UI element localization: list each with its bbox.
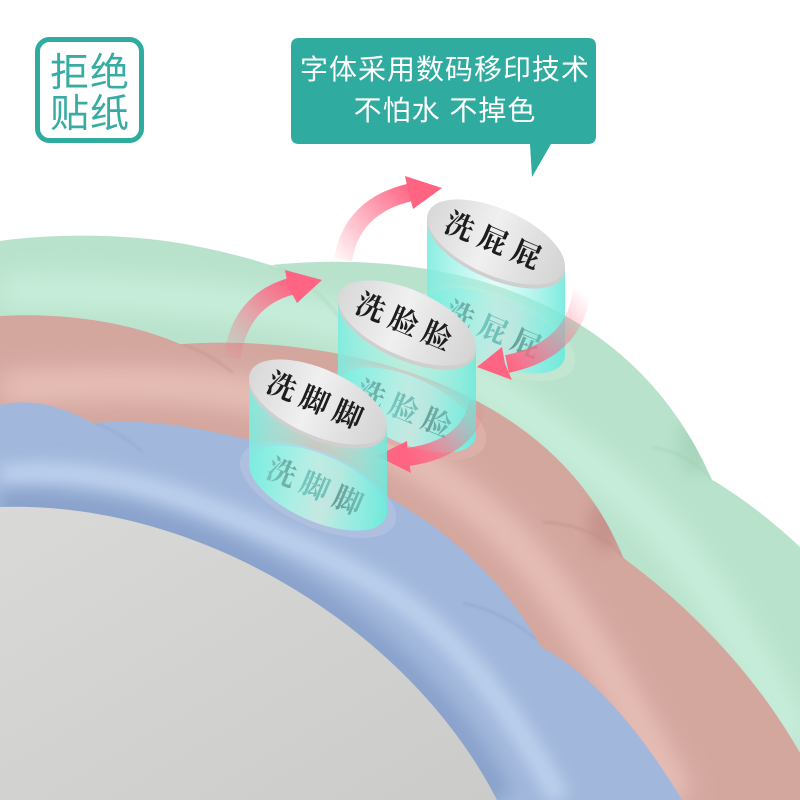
sample: butt washing tub label: 洗屁屁 bbox=[440, 295, 552, 368]
badge: reject stickers: 拒绝 bbox=[50, 52, 130, 95]
callout: digital transfer printing: 字体采用数码移印技术 bbox=[300, 54, 590, 85]
panel: grey tub basin bbox=[0, 507, 497, 800]
arrow: curved arrow from foot label to face label bbox=[232, 270, 322, 358]
badge: reject stickers: 贴纸 bbox=[50, 93, 130, 136]
sample: butt washing tub label: 洗屁屁 bbox=[440, 206, 552, 279]
sample: foot washing tub label: 洗脚脚 bbox=[262, 366, 374, 439]
badge: reject stickers bbox=[38, 40, 142, 140]
callout: digital transfer printing bbox=[291, 38, 596, 177]
callout: digital transfer printing: 不怕水 不掉色 bbox=[354, 95, 536, 126]
sample: face washing tub label: 洗脸脸 bbox=[351, 287, 463, 360]
panel: blue tub rim bbox=[0, 402, 682, 800]
sample: foot washing tub label: 洗脚脚 bbox=[262, 452, 374, 525]
sample: foot washing tub label bbox=[226, 342, 410, 558]
arrow: curved arrow to top bbox=[343, 176, 442, 260]
panel: pink tub rim bbox=[0, 315, 800, 800]
arrow: curved arrow from butt label to face label bbox=[477, 290, 582, 380]
panel: green tub rim bbox=[0, 236, 800, 800]
arrow: curved arrow from face label to foot label bbox=[377, 402, 478, 473]
sample: face washing tub label: 洗脸脸 bbox=[351, 374, 463, 447]
sample: butt washing tub label bbox=[405, 182, 589, 401]
sample: face washing tub label bbox=[316, 263, 500, 480]
